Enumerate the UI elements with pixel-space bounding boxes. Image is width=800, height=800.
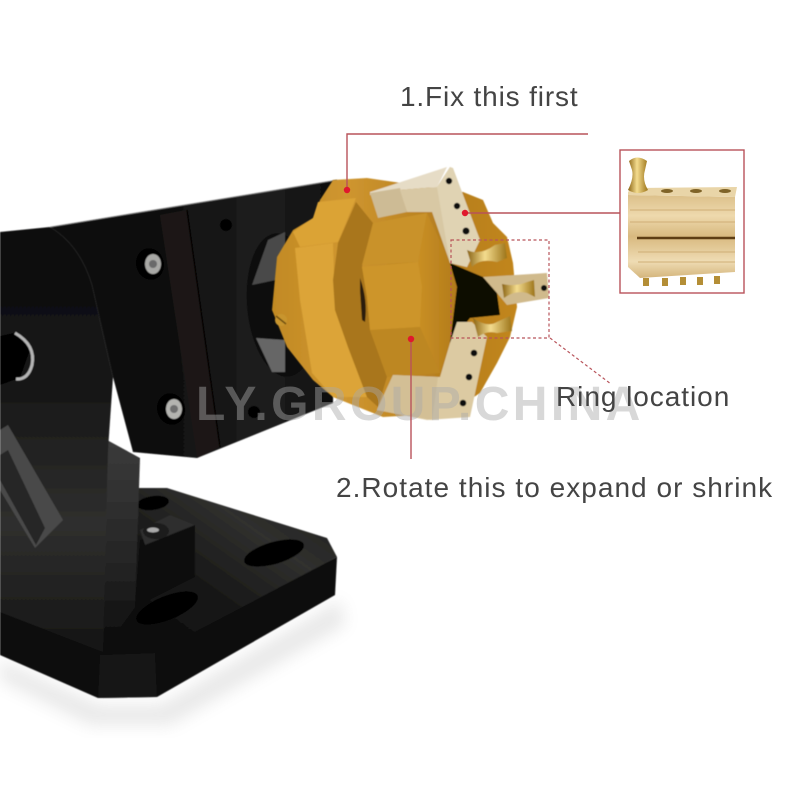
flange upper lobe xyxy=(293,198,356,247)
machine: black rotary mount xyxy=(0,180,337,698)
recessed ring xyxy=(333,202,387,407)
callout: leader line to jaw block xyxy=(462,210,620,216)
dark centre gap xyxy=(450,263,500,343)
bolts xyxy=(132,219,260,428)
base plate xyxy=(0,488,337,698)
inset: jaw block detail xyxy=(620,150,744,293)
brass jaw: bottom xyxy=(377,322,487,420)
label: ring location: Ring location xyxy=(556,381,730,412)
rear gold flange xyxy=(272,178,517,417)
flange left lobe xyxy=(295,243,367,397)
callout: leader line to hex nut xyxy=(408,336,414,459)
brass jaw: top xyxy=(370,167,480,267)
collar xyxy=(241,230,323,380)
gold chuck xyxy=(272,167,549,420)
column xyxy=(0,227,140,652)
front hex nut xyxy=(360,213,457,377)
floor shadow xyxy=(0,600,345,725)
brass jaw: middle xyxy=(483,273,549,305)
callout: leader line to flange xyxy=(344,134,588,193)
arm xyxy=(50,180,337,458)
knob shaft xyxy=(0,332,33,385)
flange set screw xyxy=(275,314,287,326)
watermark: LY.GROUP.CHINA xyxy=(196,378,644,431)
callout: dashed ring location box xyxy=(451,240,611,384)
clamp block xyxy=(135,515,195,607)
label: step 2: 2.Rotate this to expand or shrink xyxy=(336,472,773,503)
label: step 1: 1.Fix this first xyxy=(400,81,579,112)
jaw screws xyxy=(467,243,535,337)
